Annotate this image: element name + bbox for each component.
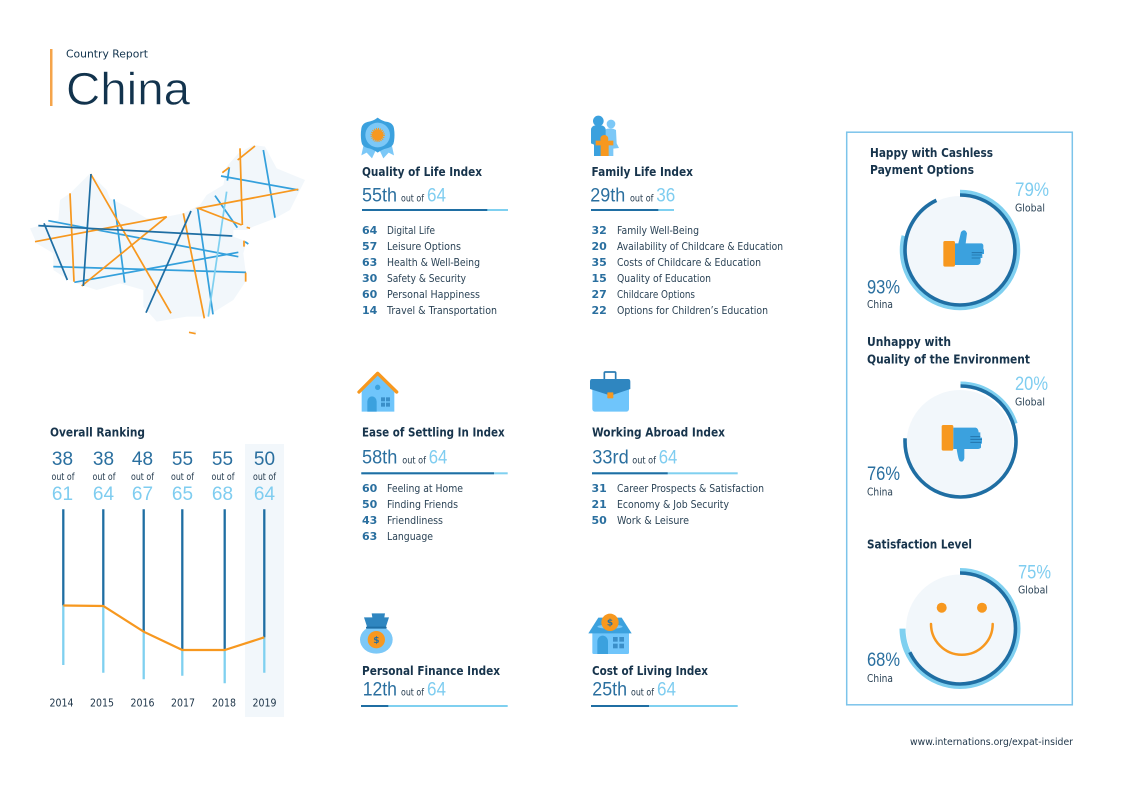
- panel: cost of living index: [588, 614, 738, 707]
- gauge: unhappy with quality of the environment: 76%: [867, 464, 900, 485]
- year labels: 2019: [252, 697, 276, 710]
- gauge: happy with cashless payment options: Payment Options: [870, 163, 974, 177]
- year labels: [50, 697, 276, 710]
- rank: out of: [632, 455, 657, 466]
- icon: house with coin: [588, 614, 632, 654]
- ranking numbers: 38: [52, 449, 73, 470]
- ranking numbers: out of: [253, 472, 277, 483]
- list of sub-rankings: Economy & Job Security: [617, 498, 730, 511]
- ranking numbers: 64: [254, 484, 275, 505]
- ranking numbers: 61: [52, 484, 73, 505]
- list of sub-rankings: [592, 224, 783, 317]
- icon: smiley face: [931, 603, 993, 655]
- rank: 55th: [362, 186, 397, 207]
- list of sub-rankings: 20: [592, 240, 607, 253]
- gauge: happy with cashless payment options: 79%: [1015, 180, 1049, 201]
- list of sub-rankings: 35: [592, 256, 607, 269]
- gauge: unhappy with quality of the environment: China: [867, 486, 893, 499]
- footer url: www.internations.org/expat-insider: [910, 737, 1073, 748]
- panel: quality of life index: [361, 118, 508, 317]
- rank: 25th: [592, 680, 627, 701]
- ranking numbers: [52, 449, 277, 505]
- list of sub-rankings: 32: [592, 224, 607, 237]
- list of sub-rankings: Personal Happiness: [387, 288, 480, 301]
- rank: out of: [401, 194, 425, 205]
- list of sub-rankings: Language: [387, 530, 433, 543]
- heading: Ease of Settling In Index: [362, 426, 505, 440]
- ranking numbers: 50: [254, 449, 275, 470]
- ranking numbers: 55: [212, 449, 233, 470]
- gauge: unhappy with quality of the environment: [867, 335, 1048, 499]
- heading: Working Abroad Index: [592, 426, 725, 440]
- gauge: satisfaction level: 75%: [1018, 562, 1051, 583]
- year labels: 2016: [130, 697, 154, 710]
- ranking numbers: 67: [132, 484, 153, 505]
- rank: out of: [630, 194, 654, 205]
- ranking numbers: out of: [171, 472, 195, 483]
- list of sub-rankings: [362, 224, 497, 317]
- list of sub-rankings: [592, 482, 764, 527]
- progress bar: [591, 209, 674, 211]
- header: country report title: [50, 48, 191, 114]
- ranking bars and trend line: [63, 509, 264, 683]
- progress bar: [361, 705, 508, 707]
- list of sub-rankings: Health & Well-Being: [387, 256, 480, 269]
- list of sub-rankings: 31: [592, 482, 607, 495]
- icon: family: [591, 116, 619, 156]
- gauge: happy with cashless payment options: Global: [1015, 202, 1045, 215]
- rank: 58th: [362, 447, 397, 468]
- gauge: satisfaction level: 68%: [867, 650, 900, 671]
- list of sub-rankings: Friendliness: [387, 514, 443, 527]
- list of sub-rankings: 60: [362, 482, 378, 495]
- list of sub-rankings: Travel & Transportation: [386, 304, 497, 317]
- panel: ease of settling in index: [359, 373, 508, 543]
- icon: thumbs up: [943, 230, 984, 267]
- ranking numbers: out of: [92, 472, 116, 483]
- ranking numbers: 64: [93, 484, 114, 505]
- list of sub-rankings: Finding Friends: [387, 498, 458, 511]
- rank: 12th: [363, 680, 397, 701]
- rank: [590, 186, 675, 207]
- rank: 36: [656, 186, 675, 207]
- list of sub-rankings: 30: [362, 272, 378, 285]
- rank: 64: [429, 447, 448, 468]
- list of sub-rankings: 63: [362, 256, 377, 269]
- panel: overall ranking: [50, 426, 284, 717]
- rank: out of: [401, 688, 425, 699]
- panel: satisfaction sidebar: [847, 132, 1072, 705]
- heading: Personal Finance Index: [362, 664, 500, 678]
- year labels: 2018: [212, 697, 236, 710]
- gauge: unhappy with quality of the environment: Global: [1015, 396, 1045, 409]
- list of sub-rankings: Feeling at Home: [387, 482, 463, 495]
- list of sub-rankings: 60: [362, 288, 378, 301]
- list of sub-rankings: Safety & Security: [387, 272, 466, 285]
- icon: house with coin: $: [607, 619, 613, 629]
- list of sub-rankings: Options for Children’s Education: [617, 304, 768, 317]
- year labels: 2015: [90, 697, 114, 710]
- ranking numbers: out of: [212, 472, 235, 483]
- rank: 64: [659, 447, 678, 468]
- rank: 29th: [590, 186, 625, 207]
- list of sub-rankings: Digital Life: [387, 224, 435, 237]
- list of sub-rankings: 50: [592, 514, 607, 527]
- rank: [362, 186, 446, 207]
- icon: house: [359, 373, 397, 412]
- icon: briefcase: [590, 372, 630, 412]
- list of sub-rankings: 64: [362, 224, 378, 237]
- ranking numbers: 38: [93, 449, 114, 470]
- gauge: unhappy with quality of the environment: Quality of the Environment: [867, 353, 1030, 367]
- progress bar: [361, 472, 508, 474]
- ranking numbers: 68: [212, 484, 233, 505]
- list of sub-rankings: Career Prospects & Satisfaction: [617, 482, 764, 495]
- icon: money bag: [360, 613, 393, 654]
- map of China with line pattern: [30, 145, 305, 334]
- gauge: unhappy with quality of the environment: Unhappy with: [867, 335, 951, 349]
- icon: rosette badge: [361, 118, 394, 158]
- list of sub-rankings: Availability of Childcare & Education: [617, 240, 783, 253]
- gauge: unhappy with quality of the environment: 20%: [1015, 374, 1048, 395]
- gauge: happy with cashless payment options: 93%: [867, 277, 900, 298]
- panel: personal finance index: [360, 613, 508, 707]
- list of sub-rankings: 21: [592, 498, 607, 511]
- rank: [592, 447, 678, 468]
- list of sub-rankings: 57: [362, 240, 377, 253]
- list of sub-rankings: Family Well-Being: [617, 224, 699, 237]
- year labels: 2017: [171, 697, 195, 710]
- ranking numbers: 65: [172, 484, 193, 505]
- list of sub-rankings: 63: [362, 530, 377, 543]
- heading: Family Life Index: [592, 165, 693, 179]
- heading: Cost of Living Index: [592, 664, 708, 678]
- rank: 64: [427, 186, 446, 207]
- icon: money bag: $: [373, 636, 379, 646]
- header: country report title: Country Report: [66, 48, 149, 61]
- rank: 64: [427, 680, 446, 701]
- ranking numbers: 48: [132, 449, 153, 470]
- heading: Quality of Life Index: [362, 165, 482, 179]
- list of sub-rankings: 14: [362, 304, 378, 317]
- gauge: happy with cashless payment options: Happy with Cashless: [870, 146, 993, 160]
- rank: 33rd: [592, 447, 629, 468]
- list of sub-rankings: 50: [362, 498, 378, 511]
- year labels: 2014: [50, 697, 74, 710]
- rank: out of: [631, 688, 655, 699]
- heading: overall ranking: Overall Ranking: [50, 426, 145, 440]
- gauge: happy with cashless payment options: [867, 146, 1049, 311]
- gauge: satisfaction level: [867, 538, 1051, 686]
- list of sub-rankings: Quality of Education: [617, 272, 711, 285]
- ranking numbers: out of: [131, 472, 155, 483]
- ranking numbers: 55: [172, 449, 193, 470]
- rank: [363, 680, 446, 701]
- gauge: satisfaction level: Global: [1018, 584, 1048, 597]
- list of sub-rankings: 15: [592, 272, 607, 285]
- rank: out of: [402, 455, 427, 466]
- panel: family life index: [590, 116, 783, 317]
- ranking numbers: out of: [52, 472, 75, 483]
- highlight column for 2019: [245, 444, 284, 717]
- progress bar: [362, 209, 508, 211]
- icon: thumbs down: [942, 425, 982, 462]
- list of sub-rankings: Work & Leisure: [617, 514, 689, 527]
- list of sub-rankings: Childcare Options: [617, 288, 695, 301]
- list of sub-rankings: 27: [592, 288, 607, 301]
- rank: 64: [657, 680, 676, 701]
- gauge: satisfaction level: China: [867, 672, 893, 685]
- list of sub-rankings: Leisure Options: [387, 240, 461, 253]
- rank: [362, 447, 448, 468]
- gauge: satisfaction level: Satisfaction Level: [867, 538, 972, 552]
- list of sub-rankings: 22: [592, 304, 607, 317]
- progress bar: [591, 705, 738, 707]
- gauge: happy with cashless payment options: China: [867, 298, 893, 311]
- rank: [592, 680, 676, 701]
- list of sub-rankings: Costs of Childcare & Education: [617, 256, 761, 269]
- panel: working abroad index: [590, 372, 764, 527]
- header: country report title: China: [66, 63, 191, 114]
- list of sub-rankings: [362, 482, 463, 543]
- list of sub-rankings: 43: [362, 514, 377, 527]
- progress bar: [592, 472, 738, 474]
